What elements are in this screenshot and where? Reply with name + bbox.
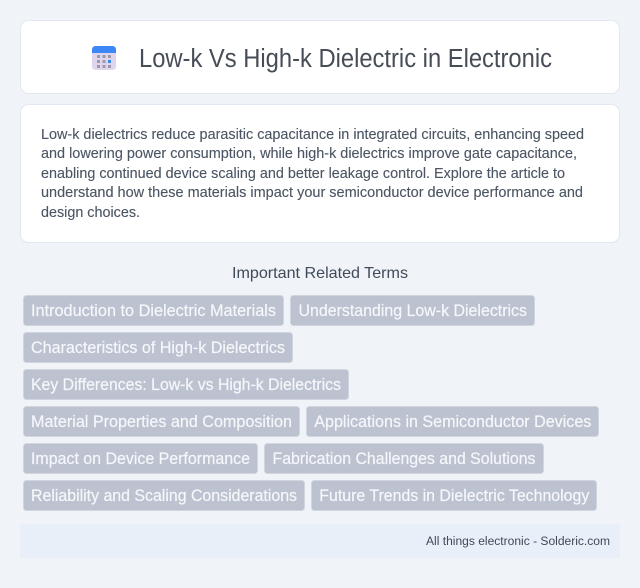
description text: design choices. (41, 205, 140, 221)
tag (24, 406, 300, 436)
icon: calendar (92, 46, 116, 70)
tag (24, 332, 292, 362)
tag (290, 296, 534, 326)
footer (20, 524, 620, 558)
description text: understand how these materials impact your semiconductor device performance and (41, 185, 583, 201)
description text: enabling continued device scaling and better leakage control. Explore the article to (41, 166, 565, 182)
tag (264, 444, 544, 474)
tag (24, 444, 258, 474)
tag (24, 480, 304, 510)
tag: Applications in Semiconductor Devices (314, 413, 591, 431)
header panel (20, 20, 620, 94)
heading: important related terms: Important Related Terms (232, 265, 408, 282)
tag: Understanding Low-k Dielectrics (298, 302, 527, 320)
description text (41, 127, 584, 221)
description text: Low-k dielectrics reduce parasitic capacitance in integrated circuits, enhancing speed (41, 127, 584, 143)
tag: Impact on Device Performance (31, 450, 250, 468)
tag: Fabrication Challenges and Solutions (272, 450, 536, 468)
tag (24, 296, 284, 326)
panel: description (20, 104, 620, 242)
tag: Key Differences: Low-k vs High-k Dielectrics (31, 376, 341, 394)
panel: related term tags (24, 296, 598, 510)
tag: Future Trends in Dielectric Technology (319, 487, 590, 505)
tag (24, 370, 348, 400)
title: Low-k Vs High-k Dielectric in Electronic (139, 45, 552, 73)
description text: and lowering power consumption, while high-k dielectrics improve gate capacitance, (41, 146, 577, 162)
footer text: All things electronic - Solderic.com (426, 534, 610, 548)
tag: Material Properties and Composition (31, 413, 292, 431)
tag: Characteristics of High-k Dielectrics (31, 339, 285, 357)
tag (312, 480, 596, 510)
tag: Reliability and Scaling Considerations (31, 487, 297, 505)
tag: Introduction to Dielectric Materials (31, 302, 276, 320)
tag (306, 406, 598, 436)
